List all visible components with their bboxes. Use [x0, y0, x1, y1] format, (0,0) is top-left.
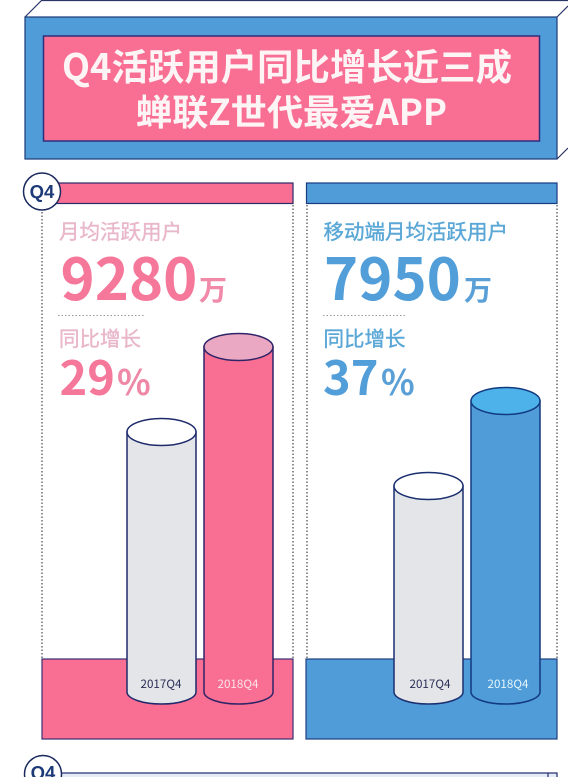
Q4 badge	[24, 173, 60, 210]
label: monthly active users: 月均活跃用户	[59, 215, 182, 245]
value: 37%	[323, 340, 415, 409]
cylinder: 2018Q4	[471, 388, 540, 704]
pink header bar	[50, 183, 293, 204]
cylinder: 2017Q4: 2017Q4	[410, 676, 451, 692]
cylinder: 2017Q4: 2017Q4	[140, 676, 182, 692]
title	[62, 38, 512, 136]
value: 29%: 29	[60, 340, 115, 409]
value: 9280万: 万	[199, 269, 227, 309]
title: Q4活跃用户同比增长近三成	[62, 38, 512, 91]
cylinder: 2018Q4	[204, 334, 273, 704]
panel: monthly active users (pink)	[24, 173, 293, 739]
value: 7950万: 万	[464, 269, 492, 309]
value: 29%	[60, 340, 151, 409]
pink base block	[42, 659, 293, 739]
title: 蝉联Z世代最爱APP	[136, 84, 447, 136]
label: mobile monthly active users: 移动端月均活跃用户	[324, 215, 508, 245]
label: year on year growth: 同比增长	[324, 322, 406, 352]
label: year on year growth: 同比增长	[59, 322, 141, 352]
value: 37%: 37	[323, 340, 378, 409]
cylinder: 2018Q4: 2018Q4	[488, 676, 529, 692]
value: 37%: %	[381, 355, 415, 406]
bar chart: blue	[394, 388, 540, 704]
cylinder: 2017Q4	[394, 472, 463, 704]
next section bar	[60, 773, 557, 777]
Q4 badge: Q4	[30, 181, 55, 202]
value: 9280万: 9280	[60, 233, 197, 317]
cylinder: 2017Q4	[127, 418, 196, 704]
Q4 badge	[24, 756, 62, 777]
panel: mobile monthly active users (blue)	[306, 183, 557, 739]
panel frame: dotted sides	[42, 205, 293, 659]
value: 29%: %	[117, 355, 151, 406]
value: 7950万: 7950	[324, 233, 461, 317]
blue base block	[306, 659, 557, 739]
cylinder: 2018Q4: 2018Q4	[218, 676, 259, 692]
next section header (cropped)	[24, 756, 557, 777]
header 3D title box	[25, 0, 568, 159]
blue header bar	[306, 183, 557, 204]
bar chart: pink	[127, 334, 273, 704]
panel frame: dotted sides	[307, 205, 557, 659]
